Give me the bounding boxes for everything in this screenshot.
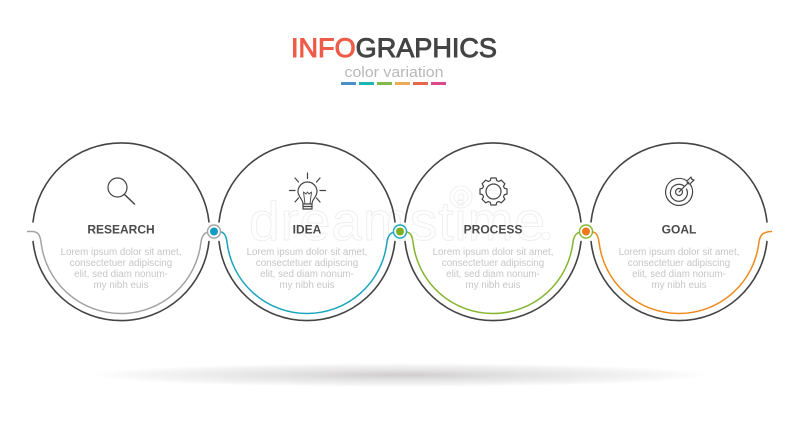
connector node: orange	[580, 225, 592, 238]
idea body text: consectetuer adipiscing	[256, 258, 358, 269]
idea connector line	[214, 232, 398, 314]
goal heading: GOAL	[662, 222, 696, 236]
connector node: green	[394, 225, 406, 238]
process connector line	[400, 232, 584, 314]
research body text: Lorem ipsum dolor sit amet,	[61, 247, 181, 258]
idea body text	[247, 247, 367, 291]
research heading: RESEARCH	[87, 222, 155, 236]
color variation swatches	[341, 82, 446, 85]
idea body text: my nibh euis	[280, 280, 335, 291]
process body text	[433, 247, 553, 291]
idea body text: elit, sed diam nonum-	[260, 269, 354, 280]
research body text: elit, sed diam nonum-	[74, 269, 168, 280]
watermark: dreamstime	[249, 190, 545, 252]
goal body text: my nibh euis	[652, 280, 707, 291]
panel: idea	[214, 143, 398, 321]
panel: research	[27, 143, 212, 321]
goal body text	[619, 247, 739, 291]
process body text: my nibh euis	[466, 280, 521, 291]
research connector line	[27, 232, 212, 314]
process body text: elit, sed diam nonum-	[446, 269, 540, 280]
icon: gear	[480, 178, 507, 205]
subtitle: color variation	[344, 64, 444, 81]
connector node: blue	[208, 225, 220, 238]
goal body text: consectetuer adipiscing	[628, 258, 730, 269]
idea ring	[219, 143, 395, 321]
floor shadow	[90, 363, 710, 387]
idea heading: IDEA	[293, 222, 322, 236]
panel: goal	[586, 143, 772, 321]
title: INFOGRAPHICS	[291, 33, 497, 63]
process ring	[405, 143, 581, 321]
icon: light bulb	[290, 173, 326, 209]
goal connector line	[586, 232, 772, 314]
goal ring	[591, 143, 767, 321]
research ring	[33, 143, 209, 321]
research body text: my nibh euis	[94, 280, 149, 291]
panel: process	[400, 143, 584, 321]
goal body text: elit, sed diam nonum-	[632, 269, 726, 280]
research body text: consectetuer adipiscing	[70, 258, 172, 269]
icon: magnifier	[108, 178, 134, 204]
process body text: consectetuer adipiscing	[442, 258, 544, 269]
idea body text: Lorem ipsum dolor sit amet,	[247, 247, 367, 258]
process heading: PROCESS	[464, 222, 522, 236]
goal body text: Lorem ipsum dolor sit amet,	[619, 247, 739, 258]
icon: target	[666, 177, 694, 205]
process body text: Lorem ipsum dolor sit amet,	[433, 247, 553, 258]
research body text	[61, 247, 181, 291]
